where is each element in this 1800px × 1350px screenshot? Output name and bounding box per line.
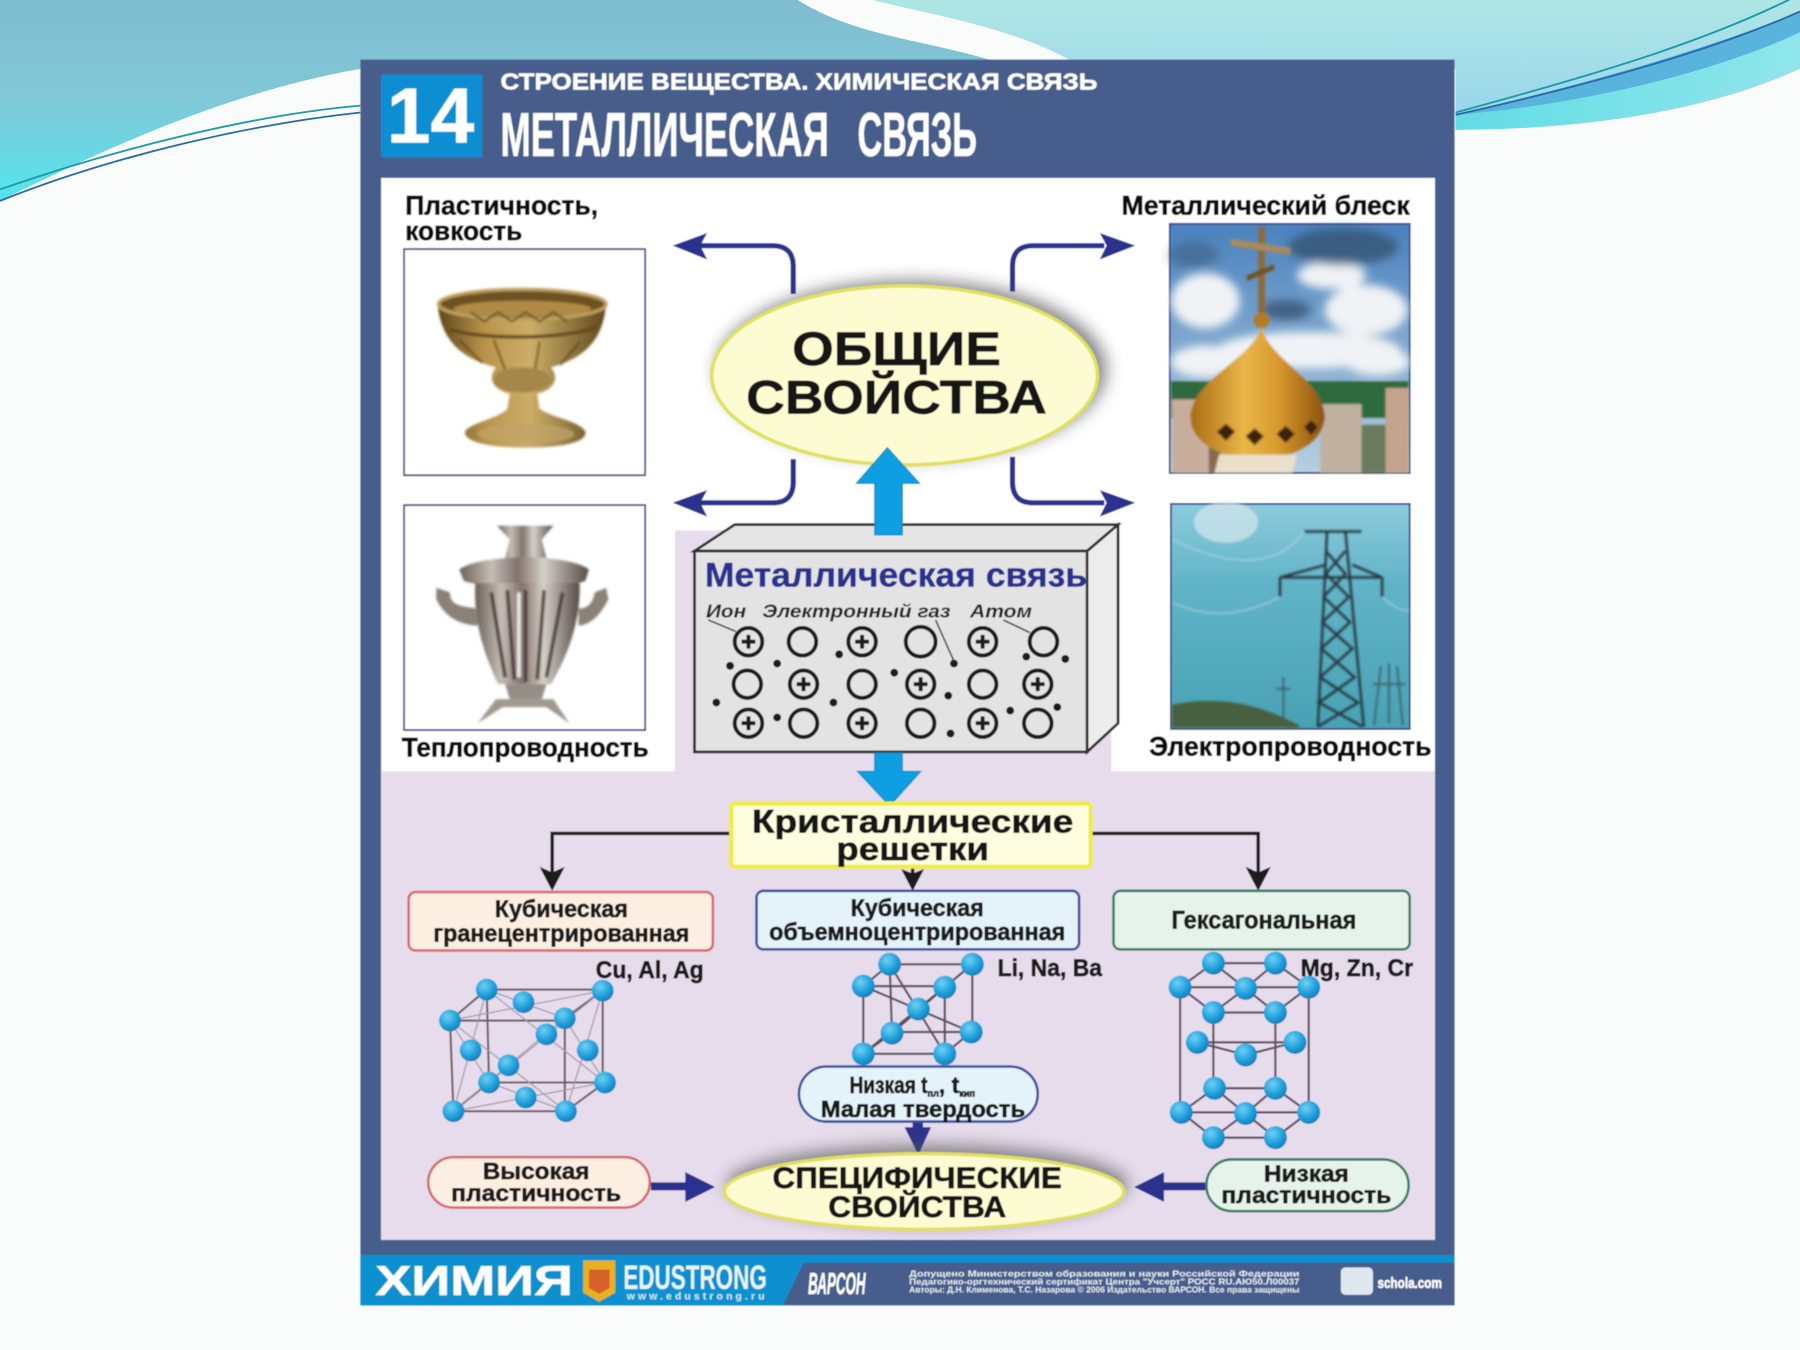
ellipse shadow [716, 280, 1107, 459]
metal block [695, 525, 1118, 752]
box: crystal lattices: Кристаллические [752, 803, 1073, 839]
metals: Cu, Al, Ag: Cu, Al, Ag [596, 957, 704, 984]
free electrons [712, 650, 1069, 737]
section heading: СТРОЕНИЕ ВЕЩЕСТВА. ХИМИЧЕСКАЯ СВЯЗЬ [501, 69, 1097, 95]
pill: low plasticity [1207, 1159, 1409, 1211]
photo: church dome [1169, 224, 1410, 473]
pill: high plasticity: пластичность [451, 1180, 621, 1206]
box: BCC: объемноцентрированная [769, 919, 1065, 946]
pill: low melting point: , t [939, 1072, 960, 1098]
arrow: low plasticity to specific [1134, 1172, 1205, 1202]
main title: СВЯЗЬ [858, 101, 977, 170]
header wave: right lower band [1456, 29, 1800, 130]
header wave: left [0, 0, 1016, 201]
legend pointers [708, 620, 1030, 661]
pill: low melting point: Малая твердость [821, 1096, 1025, 1122]
pill: low melting point: пл [928, 1088, 939, 1098]
block legend: Электронный газ [762, 601, 951, 622]
pill: low plasticity: Низкая [1264, 1160, 1349, 1186]
lattice of ions and atoms [734, 627, 1057, 737]
footer subject: ХИМИЯ [375, 1258, 573, 1304]
ellipse: specific properties: СВОЙСТВА [828, 1190, 1006, 1224]
block heading: Металлическая связь [705, 557, 1087, 595]
photo: samovar [404, 505, 645, 730]
footer fine print: Педагогико-оргтехнический сертификат Центра "Учсерт" РОСС RU.АЮ50.Л00037 [909, 1278, 1300, 1287]
footer: ВАРСОН [808, 1266, 866, 1301]
footer fine print: Допущено Министерством образования и науки Российской Федерации [909, 1270, 1300, 1279]
pill: high plasticity [428, 1157, 650, 1208]
pill: low melting point: Низкая t [849, 1072, 928, 1098]
specific ellipse shadow [727, 1145, 1128, 1225]
footer school logo [1341, 1267, 1442, 1295]
hexagonal lattice [1169, 952, 1320, 1149]
ellipse: specific properties: СПЕЦИФИЧЕСКИЕ [773, 1162, 1062, 1195]
pill: low plasticity: пластичность [1221, 1182, 1391, 1208]
arrow: high plasticity to specific [651, 1172, 715, 1202]
connector lines from crystal box [540, 833, 1271, 891]
footer fine print: Авторы: Д.Н. Клименова, Т.С. Назарова © 2006 Издательство ВАРСОН. Все права защищены [909, 1286, 1300, 1295]
BCC lattice [852, 953, 984, 1065]
box: hexagonal: Гексагональная [1171, 907, 1356, 935]
photo: goblet [404, 249, 645, 475]
block legend: Ион [706, 601, 746, 622]
label: thermal conductivity: Теплопроводность [402, 733, 649, 763]
block legend: Атом [969, 601, 1032, 622]
metals: Mg, Zn, Cr: Mg, Zn, Cr [1301, 955, 1414, 982]
ellipse: general properties: ОБЩИЕ [792, 322, 1001, 375]
footer [360, 1255, 1454, 1305]
pill: low melting point: кип [959, 1088, 975, 1098]
pill: high plasticity: Высокая [483, 1158, 589, 1184]
footer url: www.edustrong.ru [626, 1291, 765, 1302]
box: crystal lattices [731, 803, 1091, 867]
box: crystal lattices: решетки [836, 831, 989, 867]
box: FCC [409, 892, 713, 951]
arrow: pill to specific properties [905, 1123, 931, 1155]
poster body white [381, 178, 1435, 1240]
main title: МЕТАЛЛИЧЕСКАЯ [501, 101, 829, 170]
pill: low melting point [799, 1066, 1038, 1122]
footer crest [583, 1260, 615, 1302]
ellipse: general properties [712, 286, 1097, 465]
header wave: right [872, 0, 1800, 130]
lilac background zone [381, 530, 1435, 1240]
ellipse: general properties: СВОЙСТВА [746, 370, 1047, 423]
block legend [706, 601, 1032, 622]
box: BCC: Кубическая [851, 895, 984, 922]
label: plasticity: ковкость [405, 216, 522, 246]
box: FCC: гранецентрированная [433, 920, 689, 947]
photo: power tower [1171, 502, 1410, 729]
poster [360, 60, 1454, 1305]
ellipse: specific properties [724, 1154, 1124, 1229]
footer brand: EDUSTRONG [623, 1259, 767, 1297]
box: hexagonal [1114, 891, 1410, 949]
arrows: general properties to photos [673, 233, 1135, 517]
header wave: right deep ribbon [1456, 11, 1800, 115]
label: plasticity: Пластичность, [405, 191, 598, 221]
label: electrical conductivity: Электропроводность [1149, 731, 1432, 761]
FCC lattice [439, 979, 616, 1122]
box: BCC [757, 891, 1079, 949]
footer school logo: schola.com [1378, 1275, 1442, 1292]
label: metallic lustre: Металлический блеск [1122, 191, 1410, 221]
arrow: up to general properties [856, 448, 920, 535]
arrow: down to crystal lattices [858, 753, 921, 806]
header wave: thin lines [0, 0, 1800, 201]
metals: Li, Na, Ba: Li, Na, Ba [998, 955, 1103, 982]
box: FCC: Кубическая [495, 896, 628, 923]
number badge: 14 [387, 71, 474, 159]
